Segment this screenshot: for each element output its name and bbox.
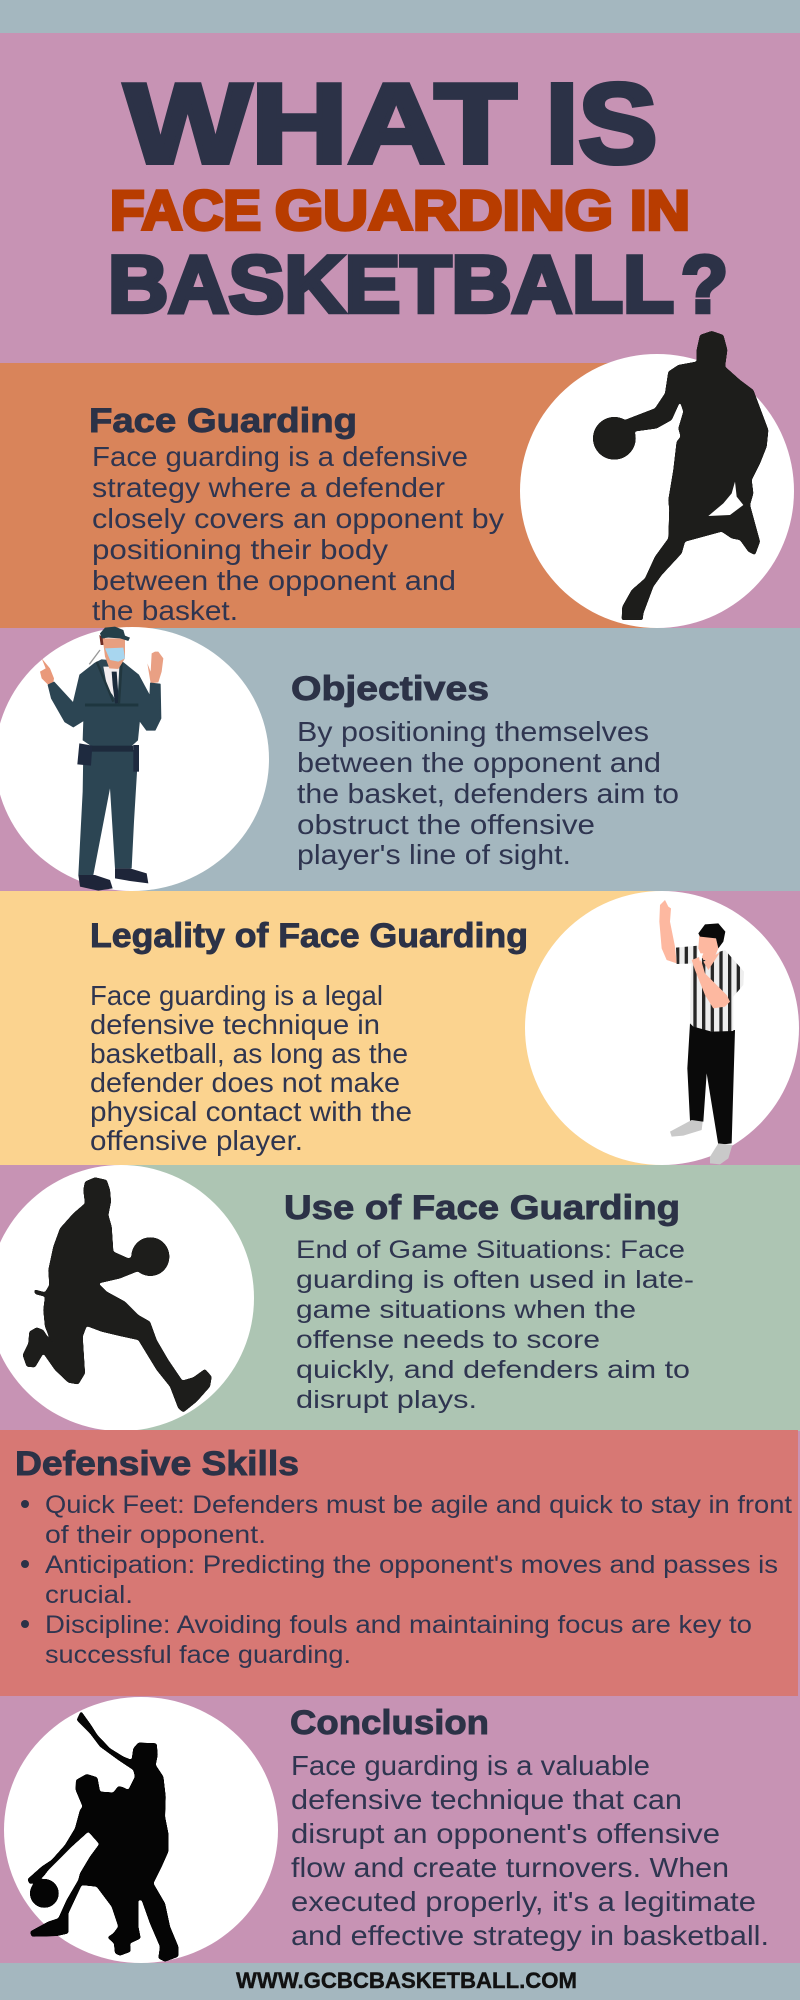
title line: face guarding in: FACE xyxy=(110,178,261,242)
image circle xyxy=(0,1165,254,1431)
body text: player's line of sight. xyxy=(297,839,571,870)
bullet list: successful face guarding. xyxy=(45,1641,351,1669)
body text: the basket, defenders aim to xyxy=(297,778,679,809)
body text: defensive technique in xyxy=(90,1009,380,1040)
body text: flow and create turnovers. When xyxy=(291,1852,729,1883)
body text: Face guarding is a defensive xyxy=(92,441,468,472)
panel: face guarding xyxy=(0,331,794,628)
panel: defensive skills xyxy=(0,1430,798,1696)
heading: Use of Face Guarding xyxy=(284,1189,680,1227)
image circle xyxy=(520,354,794,628)
body text: closely covers an opponent by xyxy=(92,503,504,534)
body text: End of Game Situations: Face xyxy=(296,1236,685,1264)
bullet list xyxy=(21,1491,792,1669)
body text: positioning their body xyxy=(92,534,388,565)
icon: official in mask xyxy=(40,627,163,891)
body text: strategy where a defender xyxy=(92,472,445,503)
title xyxy=(108,60,728,330)
body text: quickly, and defenders aim to xyxy=(296,1356,690,1384)
panel: legality xyxy=(0,891,799,1165)
footer band xyxy=(0,1963,800,2000)
body text: game situations when the xyxy=(296,1296,636,1324)
bullet list: crucial. xyxy=(45,1581,133,1609)
panel: use of face guarding xyxy=(0,1165,800,1431)
bullet list: Anticipation: Predicting the opponent's moves and passes is xyxy=(45,1551,778,1579)
body text xyxy=(90,980,412,1156)
title line: face guarding in: IN xyxy=(630,178,690,242)
image circle xyxy=(525,891,799,1165)
bullet list: Quick Feet: Defenders must be agile and quick to stay in front xyxy=(45,1491,792,1519)
title line: what is: WHAT xyxy=(124,60,516,186)
body text xyxy=(92,441,504,626)
body text: obstruct the offensive xyxy=(297,809,595,840)
heading: Conclusion xyxy=(290,1704,489,1742)
icon: two players silhouette xyxy=(27,1711,178,1962)
bullet list: of their opponent. xyxy=(45,1521,266,1549)
body text: Face guarding is a valuable xyxy=(291,1750,650,1781)
body text: guarding is often used in late- xyxy=(296,1266,694,1294)
panel: conclusion xyxy=(0,1696,800,1963)
body text: between the opponent and xyxy=(92,565,456,596)
heading: Defensive Skills xyxy=(15,1445,299,1483)
body text: defensive technique that can xyxy=(291,1784,682,1815)
icon: dribbling player silhouette xyxy=(593,331,768,620)
body text: disrupt an opponent's offensive xyxy=(291,1818,720,1849)
body text: physical contact with the xyxy=(90,1096,412,1127)
body text xyxy=(291,1750,769,1951)
body text: offense needs to score xyxy=(296,1326,600,1354)
heading: Objectives xyxy=(291,670,489,708)
panel: objectives xyxy=(0,627,800,891)
top band xyxy=(0,0,800,33)
icon: referee with whistle xyxy=(659,900,744,1164)
body text: and effective strategy in basketball. xyxy=(291,1920,769,1951)
website url: WWW.GCBCBASKETBALL.COM xyxy=(236,1968,577,1993)
body text xyxy=(296,1236,694,1414)
body text: between the opponent and xyxy=(297,747,661,778)
body text: defender does not make xyxy=(90,1067,400,1098)
image circle xyxy=(4,1697,278,1963)
body text: executed properly, it's a legitimate xyxy=(291,1886,756,1917)
title line: basketball: ? xyxy=(681,240,728,330)
body text xyxy=(297,716,679,870)
body text: basketball, as long as the xyxy=(90,1038,408,1069)
image circle xyxy=(0,627,269,891)
bullet list: Discipline: Avoiding fouls and maintaining focus are key to xyxy=(45,1611,752,1639)
body text: disrupt plays. xyxy=(296,1386,477,1414)
body text: the basket. xyxy=(92,595,238,626)
body text: Face guarding is a legal xyxy=(90,980,383,1011)
heading: Legality of Face Guarding xyxy=(90,917,528,955)
body text: offensive player. xyxy=(90,1125,303,1156)
body text: By positioning themselves xyxy=(297,716,649,747)
title line: face guarding in: GUARDING xyxy=(275,178,613,242)
heading: Face Guarding xyxy=(89,402,357,440)
title line: what is: IS xyxy=(546,60,658,186)
title line: basketball: BASKETBALL xyxy=(108,240,674,330)
icon: jumping player silhouette xyxy=(23,1177,212,1412)
